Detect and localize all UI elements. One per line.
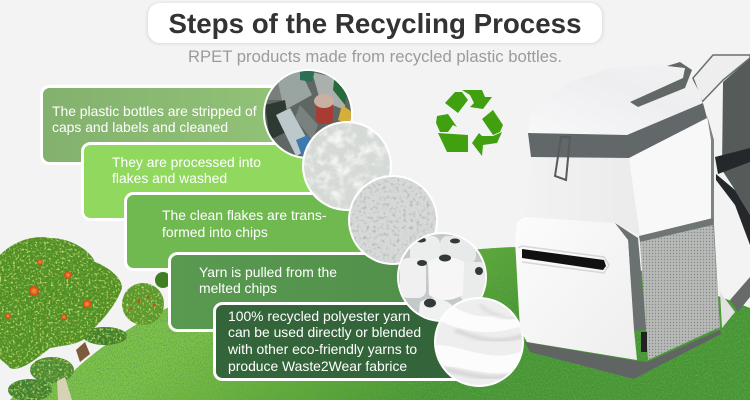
subtitle: RPET products made from recycled plastic bottles. [188, 48, 562, 66]
step 3 text: formed into chips [162, 224, 268, 240]
mesh pocket [640, 225, 720, 360]
pocket zipper [522, 249, 606, 270]
front pocket [515, 217, 637, 360]
apple tree [0, 237, 122, 369]
step 5 panel [214, 304, 476, 380]
title: Steps of the Recycling Process [168, 8, 582, 39]
step 1 text: The plastic bottles are stripped of [52, 103, 257, 119]
step 4 text: melted chips [199, 280, 277, 296]
photo: yarn cones [397, 232, 488, 322]
zipper surround [518, 246, 609, 273]
photo: plastic bottles [263, 69, 353, 159]
step 1 panel [42, 86, 304, 164]
step 3 text: The clean flakes are trans- [162, 207, 327, 223]
back panel and straps [693, 55, 750, 328]
backpack base [525, 330, 721, 379]
photo: chips [348, 175, 438, 265]
mesh band [639, 218, 713, 242]
step 4 text: Yarn is pulled from the [199, 264, 337, 280]
step 3 panel [126, 194, 388, 270]
zip band [528, 103, 707, 158]
side edge [707, 115, 720, 330]
backpack lid [528, 64, 703, 135]
step 5 text: with other eco-friendly yarns to [227, 341, 417, 357]
step 5 text: produce Waste2Wear fabrice [228, 358, 407, 374]
step 5 text: 100% recycled polyester yarn [228, 308, 410, 324]
step 5 text: can be used directly or blended [228, 324, 421, 340]
main compartment side [629, 118, 713, 236]
top handle [630, 62, 692, 107]
pocket side [615, 223, 646, 331]
step 4 panel [170, 254, 432, 330]
step 2 text: flakes and washed [112, 170, 227, 186]
label tag [641, 332, 647, 352]
step 2 panel [82, 144, 344, 220]
icon: recycling arrows [436, 90, 503, 156]
path [57, 377, 72, 400]
grass hill [10, 247, 750, 400]
small tree and shrubs [8, 272, 171, 400]
backpack [515, 55, 750, 379]
zipper pull [555, 137, 570, 180]
step 1 text: caps and labels and cleaned [52, 119, 228, 135]
photo: flakes [302, 121, 392, 211]
title pill [147, 3, 603, 44]
main compartment front [525, 157, 640, 236]
photo: white fabric [434, 297, 525, 387]
step 2 text: They are processed into [112, 154, 261, 170]
